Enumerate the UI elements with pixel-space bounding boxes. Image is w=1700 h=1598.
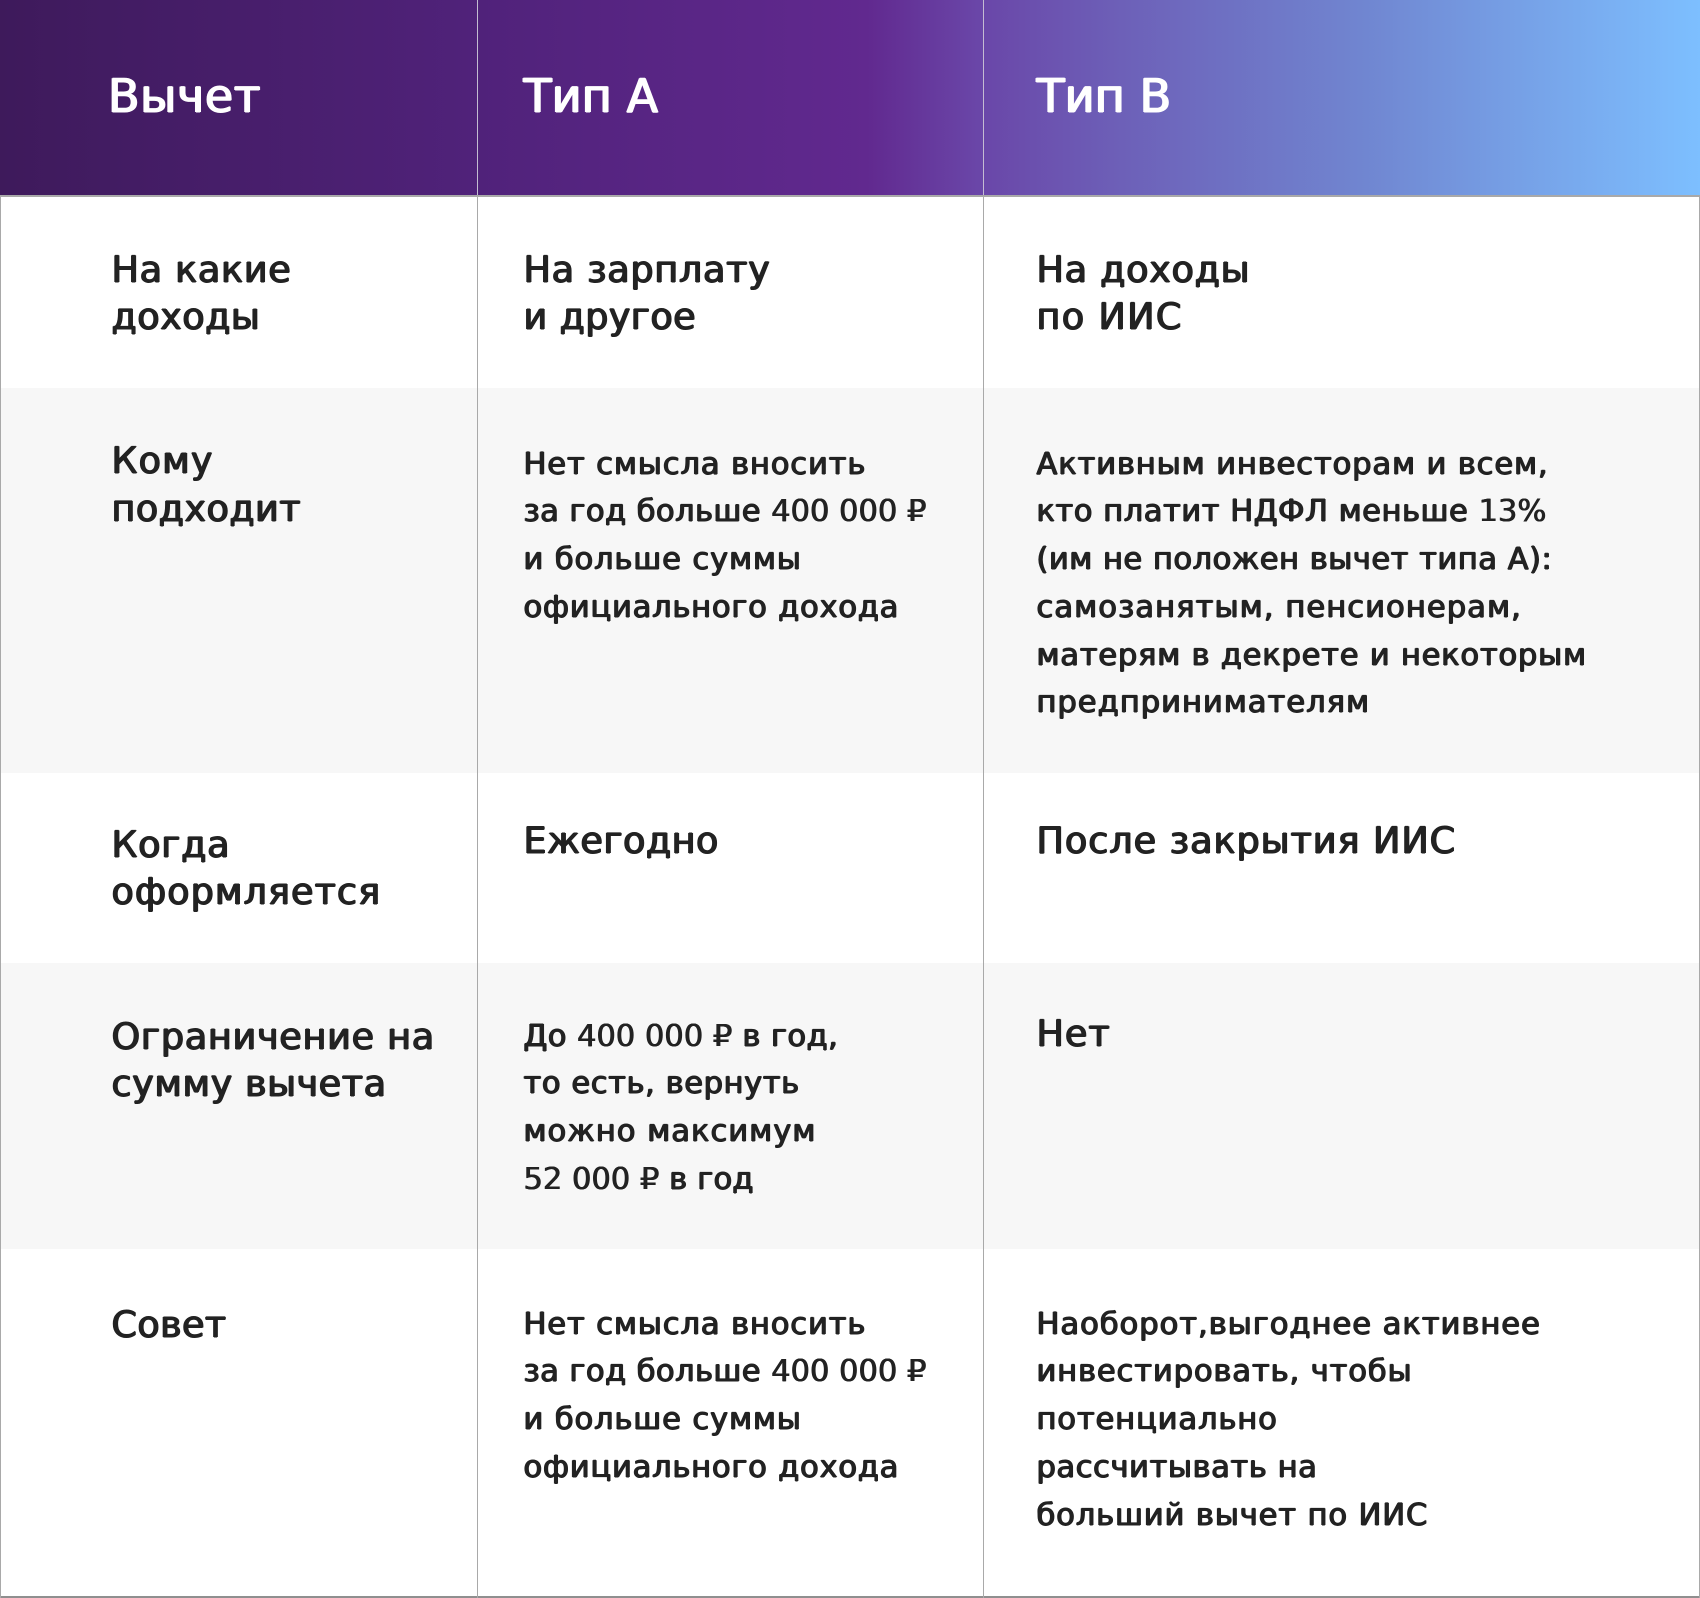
type B: whom it suits: Активным инвесторам и всем, xyxy=(1036,446,1549,482)
row band: limit xyxy=(0,963,1700,1249)
type A: whom it suits: Нет смысла вносить xyxy=(524,446,866,482)
type A: limit xyxy=(524,1018,838,1197)
type A: income: На зарплату xyxy=(524,248,771,290)
type A: whom it suits: за год больше 400 000 ₽ xyxy=(524,494,926,529)
type B: advice: больший вычет по ИИС xyxy=(1036,1498,1428,1533)
type B: income: На доходы xyxy=(1036,248,1250,290)
row label: whom it suits: подходит xyxy=(112,487,301,530)
type B: whom it suits xyxy=(1036,446,1587,720)
row label: when it is filed xyxy=(112,822,381,913)
type A: advice: Нет смысла вносить xyxy=(524,1306,866,1342)
type B: whom it suits: (им не положен вычет типа А): xyxy=(1036,542,1552,577)
heading: type B: Тип В xyxy=(1036,69,1171,123)
type A: limit: До 400 000 ₽ в год, xyxy=(524,1018,838,1054)
header band xyxy=(0,0,1700,195)
row label: whom it suits xyxy=(112,439,301,530)
row label: when it is filed: Когда xyxy=(112,822,230,866)
type B: advice: потенциально xyxy=(1036,1402,1278,1437)
type A: income xyxy=(524,248,771,338)
type A: when it is filed: Ежегодно xyxy=(524,818,719,862)
type B: whom it suits: кто платит НДФЛ меньше 13% xyxy=(1036,494,1546,529)
type B: income: по ИИС xyxy=(1036,295,1183,338)
type A: advice: официального дохода xyxy=(524,1450,899,1485)
row label: limit: сумму вычета xyxy=(112,1062,387,1105)
type A: whom it suits: официального дохода xyxy=(524,590,899,625)
row label: advice: Совет xyxy=(112,1302,227,1346)
type A: income: и другое xyxy=(524,295,696,338)
type B: advice: Наоборот,выгоднее активнее xyxy=(1036,1306,1541,1342)
row label: limit xyxy=(112,1014,435,1105)
type A: limit: то есть, вернуть xyxy=(524,1066,800,1101)
type A: advice xyxy=(524,1306,926,1485)
type A: whom it suits: и больше суммы xyxy=(524,542,802,577)
type B: whom it suits: предпринимателям xyxy=(1036,685,1370,720)
type B: whom it suits: матерям в декрете и некоторым xyxy=(1036,638,1587,673)
row label: limit: Ограничение на xyxy=(112,1014,435,1058)
type A: limit: можно максимум xyxy=(524,1114,816,1149)
type B: advice xyxy=(1036,1306,1541,1533)
row band: whom it suits xyxy=(0,388,1700,773)
heading: deduction: Вычет xyxy=(108,69,261,123)
row label: when it is filed: оформляется xyxy=(112,870,381,913)
type A: whom it suits xyxy=(524,446,926,625)
type B: advice: рассчитывать на xyxy=(1036,1450,1318,1485)
type A: advice: и больше суммы xyxy=(524,1402,802,1437)
row label: income xyxy=(112,248,292,338)
type B: limit: Нет xyxy=(1036,1012,1111,1054)
row label: income: доходы xyxy=(112,295,260,338)
type B: advice: инвестировать, чтобы xyxy=(1036,1354,1413,1389)
row label: whom it suits: Кому xyxy=(112,439,214,482)
row label: income: На какие xyxy=(112,248,292,290)
type B: when it is filed: После закрытия ИИС xyxy=(1036,818,1456,862)
type A: advice: за год больше 400 000 ₽ xyxy=(524,1354,926,1389)
heading: type A: Тип А xyxy=(524,69,658,123)
type B: income xyxy=(1036,248,1250,338)
type B: whom it suits: самозанятым, пенсионерам, xyxy=(1036,590,1522,625)
type A: limit: 52 000 ₽ в год xyxy=(524,1162,754,1197)
